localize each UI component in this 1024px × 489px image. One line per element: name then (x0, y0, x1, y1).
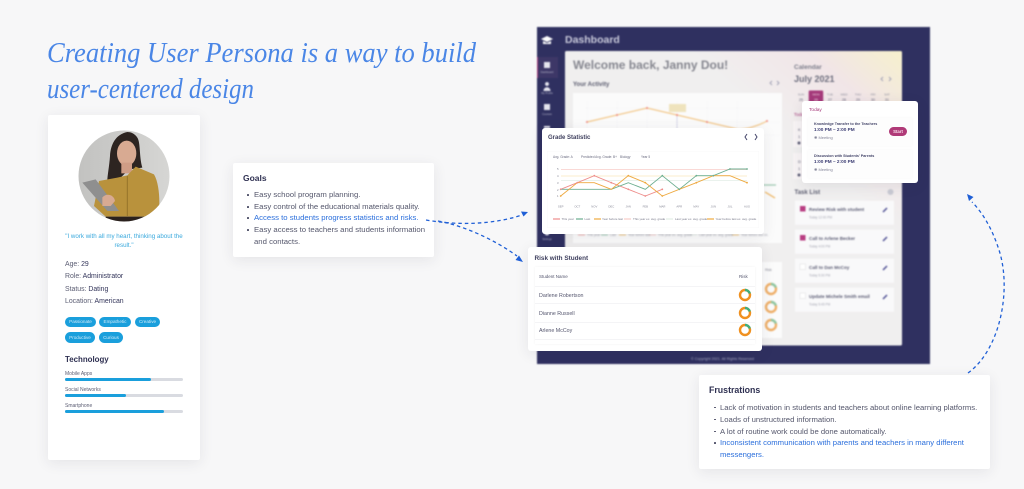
arrow: frustrations to today card (967, 194, 1005, 374)
risk table: Risk (739, 274, 748, 278)
goals list: Easy school program planning. (254, 190, 360, 199)
line chart: Year 5 (641, 155, 650, 159)
dashboard screenshot: 28 (842, 98, 846, 102)
line chart: Year before last (602, 217, 623, 221)
frustrations list (714, 402, 977, 459)
line chart: NOV (591, 204, 597, 208)
demographic details: Status: Dating (65, 286, 108, 292)
dashboard screenshot: Today 5:45 PM (809, 302, 831, 306)
panel: today schedule card (802, 101, 918, 183)
demographic details: Role: Administrator (65, 273, 123, 280)
dashboard screenshot: Last year ex. avg. grade (699, 233, 733, 237)
dashboard screenshot: Your Activity (573, 82, 610, 88)
risk table: Darlene Robertson (539, 292, 583, 298)
meeting: knowledge transfer (808, 118, 912, 146)
dashboard screenshot: Settings (542, 237, 552, 241)
frustrations list: messengers. (720, 450, 764, 459)
meeting: students parents: ✺ Meeting (814, 167, 833, 172)
dashboard screenshot: D (798, 159, 801, 164)
personality tags: Curious (103, 335, 119, 340)
technology bars (65, 371, 183, 413)
line chart: Biology (620, 155, 631, 159)
line chart: 3 (557, 181, 559, 185)
dashboard screenshot: 1 (798, 166, 801, 171)
title (47, 37, 476, 105)
line chart: 1 (557, 194, 559, 198)
frustrations list: Loads of unstructured information. (720, 414, 837, 424)
dashboard screenshot: FRI (871, 92, 876, 96)
frustrations list: A lot of routine work could be done automatically. (720, 426, 887, 436)
goals list: Access to students progress statistics and risks. (254, 213, 419, 222)
dashboard screenshot: SAT (884, 92, 890, 96)
dashboard screenshot: SUN (798, 92, 804, 96)
dashboard screenshot: 25 (799, 98, 803, 102)
dashboard screenshot: © Copyright 2021. All Rights Reserved (691, 357, 754, 361)
dashboard screenshot: Calendar (794, 64, 822, 71)
grade statistic arrows (744, 134, 758, 140)
dashboard screenshot: Dashboard (565, 34, 620, 46)
line chart: This year ex. avg. grade (633, 217, 666, 221)
risk table: Student Name (539, 274, 568, 278)
line chart: 5 (557, 167, 559, 171)
demographic details (65, 260, 124, 305)
line chart: SEP (558, 204, 564, 208)
personality tags: Passionate (69, 319, 92, 324)
line chart: OCT (574, 204, 581, 208)
line chart: Year before last ex. avg. grade (716, 217, 757, 221)
line chart: DEC (608, 204, 614, 208)
personality tags (65, 317, 160, 343)
line chart: Last year ex. avg. grade (675, 217, 708, 221)
dashboard screenshot: This year (587, 233, 601, 237)
panel: grade statistic (542, 128, 764, 234)
line chart: MAR (659, 204, 665, 208)
panel: frustrations (699, 375, 990, 469)
line chart: Last (584, 217, 590, 221)
meeting: knowledge transfer: ✺ Meeting (814, 135, 833, 140)
line chart: MAY (693, 204, 699, 208)
dashboard screenshot: WED (840, 92, 848, 96)
line chart (553, 155, 757, 221)
personality tags: Empathetic (104, 319, 126, 324)
dashboard screenshot: Today 5:30 PM (809, 274, 831, 278)
dashboard screenshot: Year before last ex. (741, 233, 768, 237)
today heading: Today (809, 108, 822, 112)
technology bars: Smartphone (65, 403, 92, 409)
dashboard screenshot: 1 (798, 134, 801, 139)
dashboard screenshot: MON (812, 92, 820, 96)
dashboard screenshot: 30 (871, 98, 875, 102)
risk donuts (738, 288, 752, 336)
meeting: knowledge transfer: 1:00 PM – 2:00 PM (814, 127, 855, 132)
arrow: goals to risk with student (438, 220, 523, 262)
risk table: Dianne Russell (539, 310, 575, 316)
dashboard screenshot: Last (610, 233, 616, 237)
line chart: APR (676, 204, 682, 208)
dashboard screenshot: My Profile (541, 91, 553, 95)
risk table: Arlene McCoy (539, 328, 572, 334)
dashboard screenshot: Dashboard (541, 70, 554, 74)
title: user-centered design (47, 73, 254, 105)
dashboard screenshot: Update Michele Smith email (809, 294, 870, 299)
panel: risk with student (528, 247, 762, 351)
meeting: students parents (808, 150, 912, 178)
technology bars: Mobile Apps (65, 371, 92, 377)
demographic details: Location: American (65, 298, 124, 305)
arrow: goals to grade statistic (426, 212, 528, 224)
line chart: JUL (728, 204, 733, 208)
dashboard screenshot: K (798, 127, 801, 132)
goals list: Easy control of the educational materials quality. (254, 202, 420, 211)
line chart: AUG (744, 204, 750, 208)
goals list: and contacts. (254, 237, 300, 246)
personality tags: Productive (69, 335, 91, 340)
line chart: This year (562, 217, 574, 221)
technology heading: Technology (65, 355, 109, 364)
dashboard screenshot: Today 12:00 PM (809, 216, 832, 220)
line chart: JUN (711, 204, 716, 208)
dashboard screenshot: 27 (828, 98, 832, 102)
dashboard screenshot: 31 (885, 98, 889, 102)
meeting: knowledge transfer: Knowledge Transfer to the Teachers (814, 122, 877, 126)
start button: Start (893, 128, 903, 134)
dashboard screenshot: This year ex. avg. grade (658, 233, 692, 237)
dashboard screenshot: Today 4:00 PM (809, 244, 831, 248)
dashboard screenshot: THU (855, 92, 861, 96)
dashboard screenshot: Courses (542, 112, 553, 116)
dashboard screenshot (536, 26, 931, 365)
frustrations heading: Frustrations (709, 385, 760, 395)
personality tags: Creative (139, 319, 156, 324)
quote: "I work with all my heart, thinking about the result." (65, 233, 183, 248)
grade statistic heading: Grade Statistic (548, 134, 590, 140)
dashboard screenshot: 29 (856, 98, 860, 102)
line chart: Predicted Avg. Grade: B+ (581, 155, 617, 159)
dashboard screenshot: Welcome back, Janny Dou! (573, 58, 728, 72)
risk table (535, 267, 755, 344)
dashboard screenshot: 26 (814, 98, 818, 102)
panel: persona card (48, 115, 200, 460)
dashboard screenshot: Call to Arlene Becker (809, 236, 855, 241)
meeting: students parents: 1:00 PM – 2:00 PM (814, 159, 855, 164)
dashboard screenshot: July 2021 (794, 74, 835, 84)
goals list: Easy access to teachers and students information (254, 225, 425, 234)
panel: goals (233, 163, 434, 257)
dashboard screenshot: Today (794, 112, 807, 117)
line chart: JAN (626, 204, 631, 208)
dashboard screenshot: Task List (794, 190, 820, 196)
meeting: students parents: Discussion with Students' Parents (814, 154, 874, 158)
dashboard screenshot: Risk (765, 268, 772, 272)
demographic details: Age: 29 (65, 260, 89, 268)
dashboard screenshot: Call to Dan McCoy (809, 265, 850, 270)
goals list (247, 190, 425, 246)
line chart: 2 (557, 188, 559, 192)
start button (889, 126, 907, 136)
persona photo (78, 130, 170, 222)
line chart: 4 (557, 174, 559, 178)
dashboard screenshot: Review Risk with student (809, 207, 865, 212)
line chart: FEB (643, 204, 648, 208)
risk heading: Risk with Student (534, 255, 588, 262)
line chart: Avg. Grade: A (553, 155, 574, 159)
technology bars: Social Networks (65, 387, 101, 393)
dashboard screenshot: TUE (827, 92, 833, 96)
frustrations list: Inconsistent communication with parents and teachers in many different (720, 438, 964, 447)
frustrations list: Lack of motivation in students and teachers about online learning platforms. (720, 402, 977, 412)
goals heading: Goals (243, 173, 267, 183)
dashboard screenshot: Year before last (628, 233, 650, 237)
